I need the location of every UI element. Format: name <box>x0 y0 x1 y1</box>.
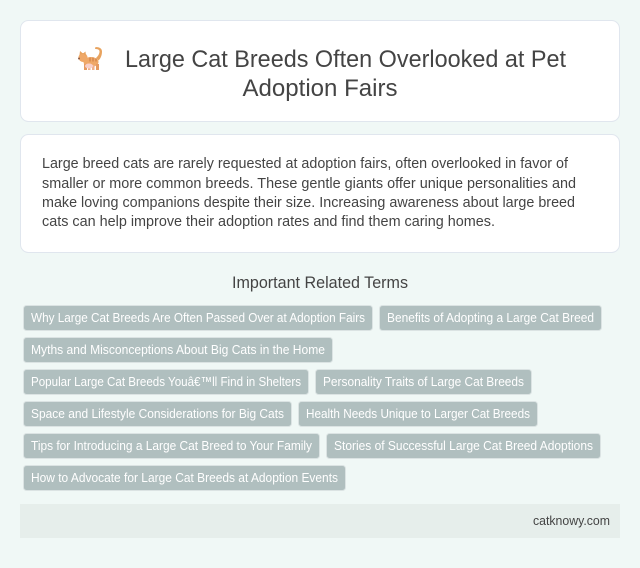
intro paragraph: smaller or more common breeds. These gentle giants offer unique personalities and <box>42 175 576 192</box>
tag <box>24 434 320 458</box>
tag: Myths and Misconceptions About Big Cats in the Home <box>31 342 325 357</box>
tag <box>24 370 308 394</box>
tag: How to Advocate for Large Cat Breeds at Adoption Events <box>31 470 338 485</box>
tag: Why Large Cat Breeds Are Often Passed Over at Adoption Fairs <box>31 310 365 325</box>
tag <box>326 434 600 458</box>
tag <box>24 338 332 362</box>
tag: Stories of Successful Large Cat Breed Adoptions <box>334 438 593 453</box>
tag: Personality Traits of Large Cat Breeds <box>323 374 524 389</box>
intro paragraph: cats can help improve their adoption rates and find them caring homes. <box>42 213 495 230</box>
title <box>125 46 566 102</box>
tag <box>24 402 292 426</box>
tag <box>316 370 532 394</box>
intro paragraph: Large breed cats are rarely requested at adoption fairs, often overlooked in favor of <box>42 155 569 172</box>
intro paragraph: make loving companions despite their size. Increasing awareness about large breed <box>42 194 575 211</box>
tag: Benefits of Adopting a Large Cat Breed <box>387 310 594 325</box>
intro paragraph <box>42 155 576 230</box>
tag <box>24 306 372 330</box>
tag: Space and Lifestyle Considerations for Big Cats <box>31 406 284 421</box>
tag <box>24 466 346 490</box>
panel: title card <box>20 20 620 122</box>
tag <box>380 306 602 330</box>
tag: Popular Large Cat Breeds Youâ€™ll Find in Shelters <box>31 374 301 389</box>
footer: catknowy.com <box>533 513 610 528</box>
icon: cat <box>78 47 102 70</box>
heading: important related terms: Important Related Terms <box>232 274 408 292</box>
tag <box>298 402 538 426</box>
tag: Tips for Introducing a Large Cat Breed to Your Family <box>31 438 312 453</box>
title: Large Cat Breeds Often Overlooked at Pet <box>125 46 566 73</box>
title: Adoption Fairs <box>242 75 398 102</box>
tag: Health Needs Unique to Larger Cat Breeds <box>306 406 530 421</box>
tag list <box>24 306 602 490</box>
footer <box>20 504 620 538</box>
panel: introduction <box>20 134 620 252</box>
